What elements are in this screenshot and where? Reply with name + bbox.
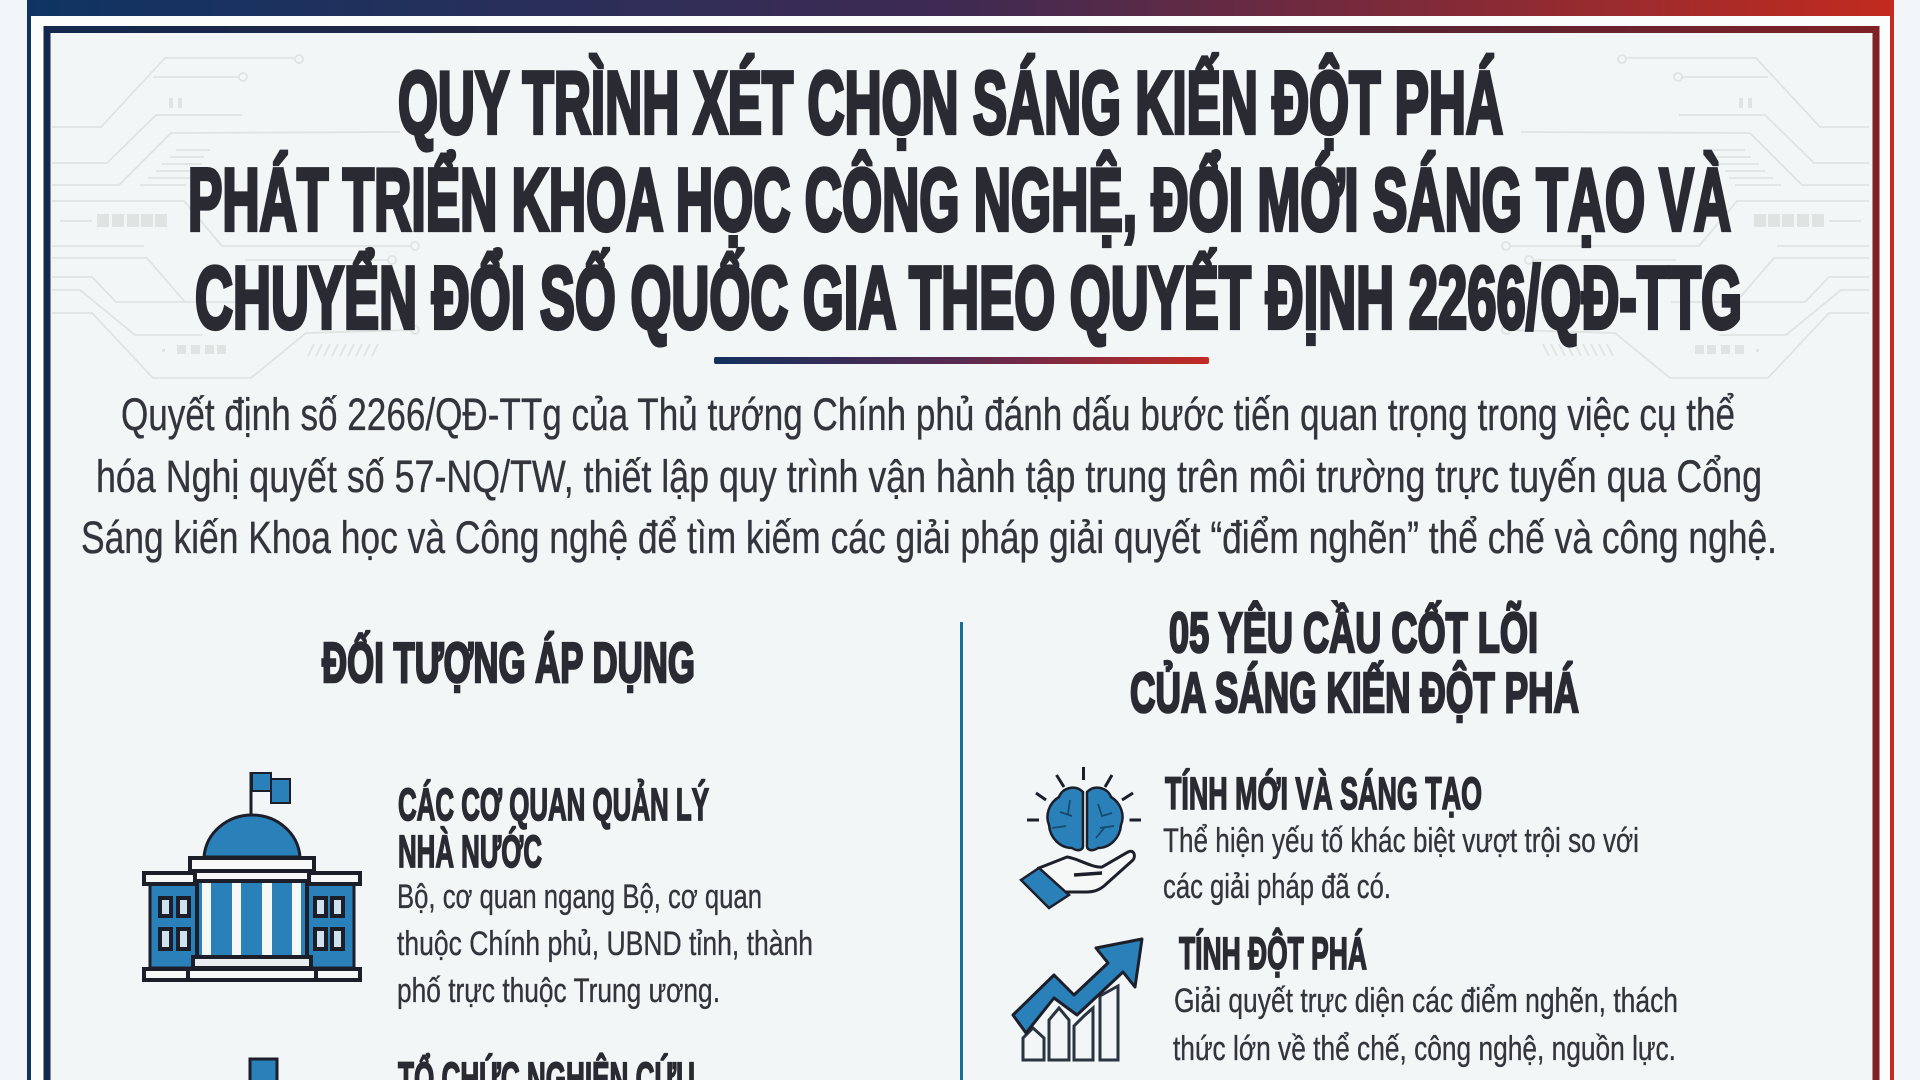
- item: cac co quan quan ly nha nuoc: [397, 779, 813, 1010]
- heading: doi tuong ap dung: ĐỐI TƯỢNG ÁP DỤNG: [322, 630, 695, 695]
- heading: 05 yeu cau cot loi: CỦA SÁNG KIẾN ĐỘT PHÁ: [1130, 660, 1579, 725]
- heading: 05 yeu cau cot loi: 05 YÊU CẦU CỐT LÕI: [1169, 600, 1538, 665]
- item: cac co quan quan ly nha nuoc: thuộc Chính phủ, UBND tỉnh, thành: [397, 925, 813, 963]
- title divider: [714, 357, 1209, 364]
- item: tinh dot pha: [1173, 928, 1678, 1068]
- item: cac co quan quan ly nha nuoc: phố trực thuộc Trung ương.: [397, 972, 720, 1010]
- circuit background right: [1502, 55, 1869, 378]
- title: [188, 53, 1742, 347]
- item: tinh moi va sang tao: TÍNH MỚI VÀ SÁNG TẠO: [1165, 768, 1482, 819]
- item: tinh dot pha: Giải quyết trực diện các điểm nghẽn, thách: [1174, 982, 1678, 1020]
- item: tinh moi va sang tao: [1163, 768, 1639, 906]
- heading: 05 yeu cau cot loi: [1130, 600, 1579, 725]
- item: cac co quan quan ly nha nuoc: Bộ, cơ quan ngang Bộ, cơ quan: [397, 878, 762, 916]
- icon: brain in hand: [1021, 767, 1141, 908]
- item: cac co quan quan ly nha nuoc: NHÀ NƯỚC: [398, 826, 542, 877]
- circuit background left: [52, 55, 419, 378]
- icon: research organisation (cropped): [250, 1059, 277, 1080]
- item: tinh dot pha: TÍNH ĐỘT PHÁ: [1179, 928, 1367, 979]
- intro paragraph: [81, 389, 1777, 563]
- icon: growth chart: [1013, 939, 1142, 1060]
- item: tinh dot pha: thức lớn về thể chế, công nghệ, nguồn lực.: [1173, 1030, 1676, 1068]
- item: cac co quan quan ly nha nuoc: CÁC CƠ QUAN QUẢN LÝ: [398, 779, 709, 830]
- item: tinh moi va sang tao: các giải pháp đã có.: [1163, 868, 1391, 906]
- item: tinh moi va sang tao: Thể hiện yếu tố khác biệt vượt trội so với: [1163, 822, 1639, 860]
- column divider: [960, 622, 963, 1080]
- icon: government building: [144, 772, 360, 980]
